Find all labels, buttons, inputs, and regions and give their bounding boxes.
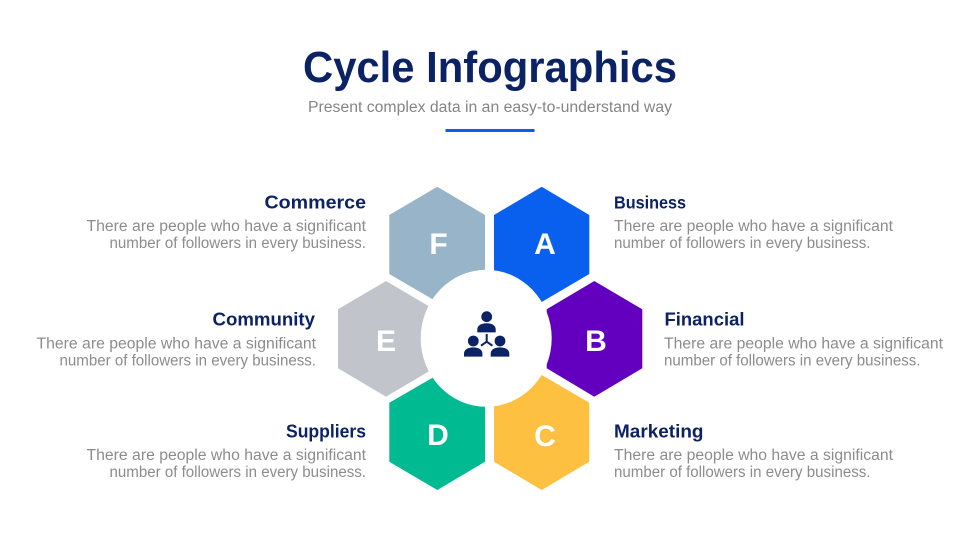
center circle <box>421 270 552 407</box>
letter D: D <box>427 419 449 452</box>
description: There are people who have a significant <box>664 335 944 352</box>
description: number of followers in every business. <box>110 235 366 252</box>
panel: Community <box>36 309 317 369</box>
panel: Financial <box>664 309 944 369</box>
panel: Suppliers <box>86 420 367 481</box>
panel: Marketing <box>614 420 894 481</box>
hexagon D <box>389 375 485 490</box>
description: number of followers in every business. <box>664 352 920 369</box>
description: number of followers in every business. <box>60 352 316 369</box>
letter C: C <box>534 420 556 453</box>
hexagon ring <box>338 187 642 490</box>
description: There are people who have a significant <box>614 447 894 464</box>
heading: Community <box>212 309 316 330</box>
icon: three connected people <box>464 311 509 357</box>
description: There are people who have a significant <box>86 447 367 464</box>
letter A: A <box>534 228 556 261</box>
heading: Commerce <box>264 192 366 212</box>
title underline <box>446 129 534 132</box>
hexagon F <box>389 187 485 302</box>
description: There are people who have a significant <box>614 218 894 235</box>
letter F: F <box>429 228 448 261</box>
description: number of followers in every business. <box>110 464 366 481</box>
heading: Marketing <box>614 420 704 442</box>
hexagon A <box>494 187 589 302</box>
heading: Financial <box>664 309 744 330</box>
title: Cycle Infographics <box>303 43 677 92</box>
heading: Business <box>614 192 686 212</box>
hexagon B <box>547 281 642 397</box>
hexagon C <box>494 375 589 490</box>
heading: Suppliers <box>286 420 366 442</box>
panel: Commerce <box>86 192 367 252</box>
description: There are people who have a significant <box>36 335 317 352</box>
letter E: E <box>376 325 396 358</box>
hexagon E <box>338 281 434 397</box>
letter B: B <box>585 325 607 358</box>
description: number of followers in every business. <box>614 464 870 481</box>
subtitle: Present complex data in an easy-to-understand way <box>308 99 672 116</box>
description: number of followers in every business. <box>614 235 870 252</box>
panel: Business <box>614 192 894 252</box>
description: There are people who have a significant <box>86 218 367 235</box>
